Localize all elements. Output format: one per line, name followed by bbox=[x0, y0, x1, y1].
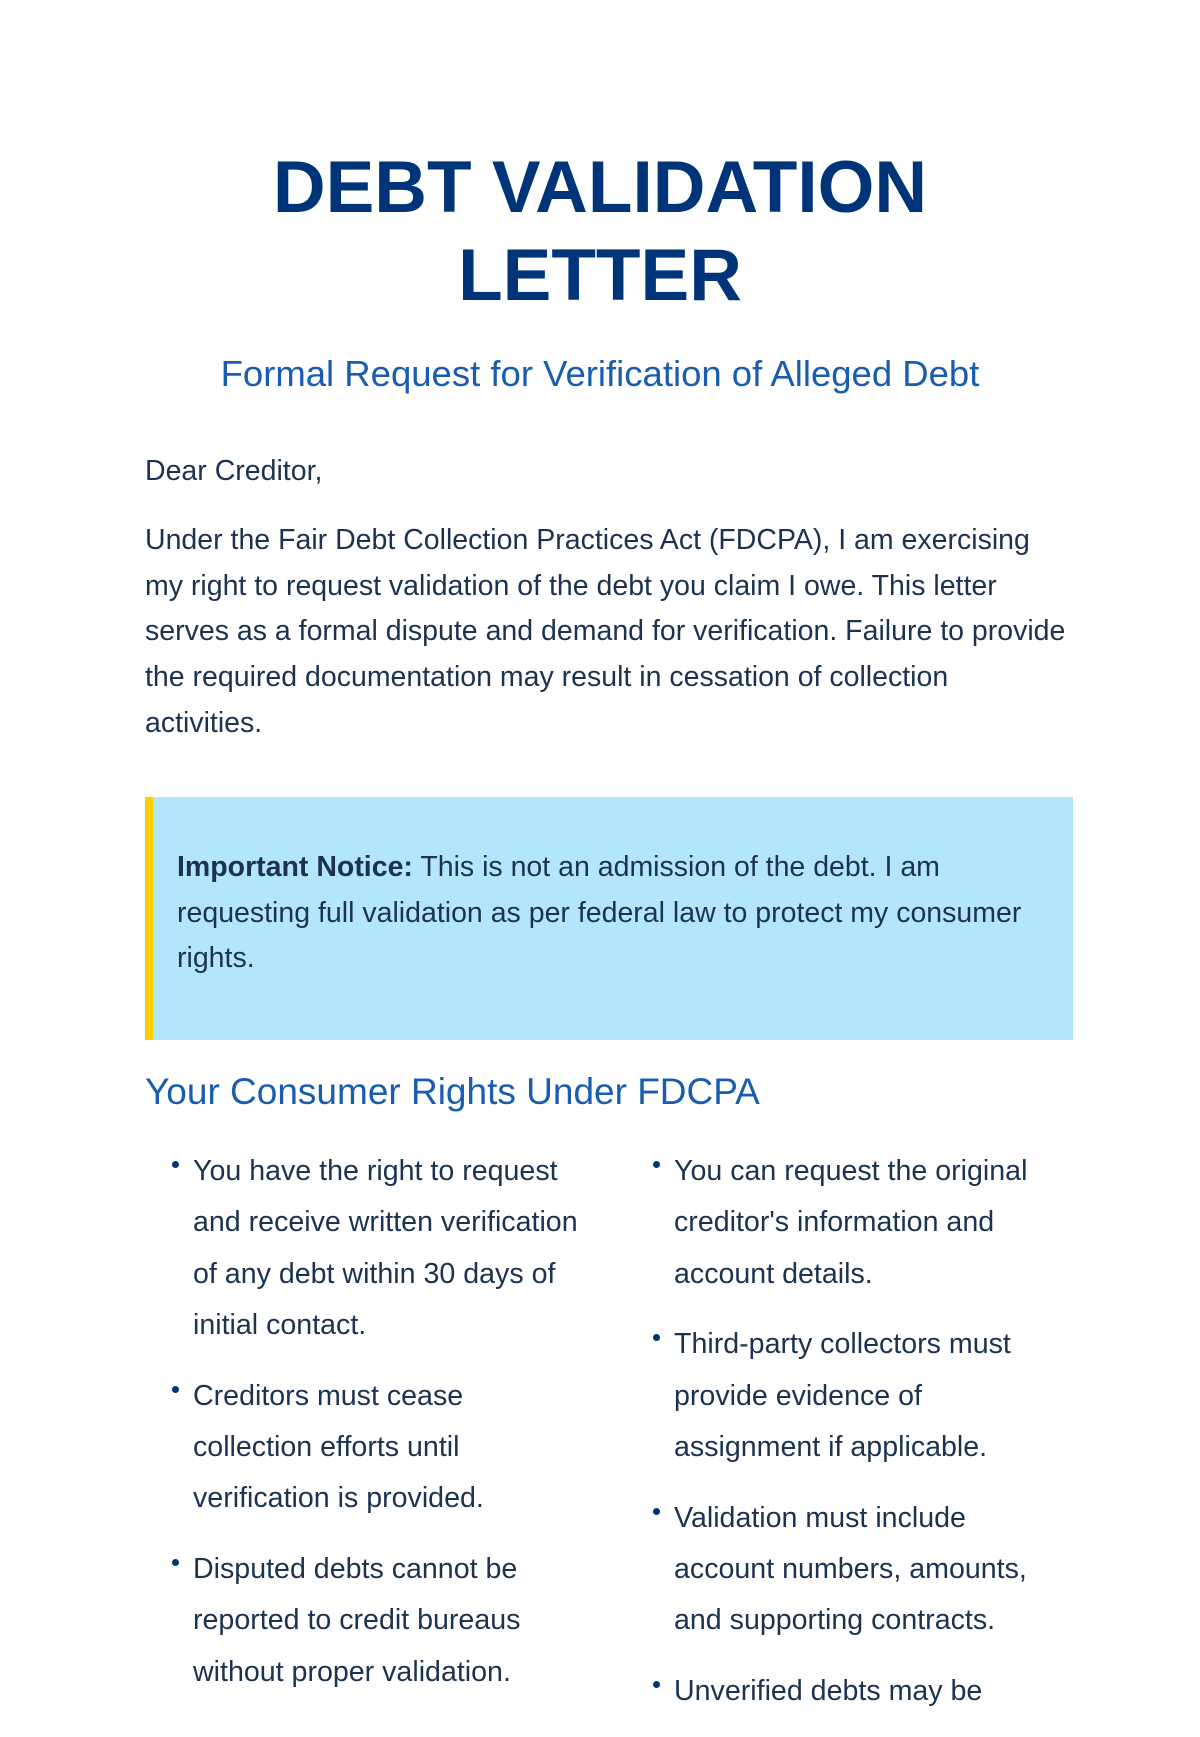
list item: original creditor: You can request the original bbox=[674, 1155, 1027, 1187]
list item: third-party collectors: Third-party collectors must bbox=[674, 1328, 1011, 1360]
greeting: Dear Creditor, bbox=[145, 455, 322, 487]
list item: validation contents bbox=[674, 1493, 1027, 1647]
callout: important notice bbox=[145, 797, 1073, 1040]
title: LETTER bbox=[458, 235, 742, 316]
intro paragraph bbox=[145, 524, 1065, 739]
list item: written verification bbox=[193, 1146, 578, 1351]
list item: written verification: of any debt within 30 days of bbox=[193, 1258, 555, 1290]
callout: important notice: Important Notice: This is not an admission of the debt. I am bbox=[177, 851, 940, 883]
list item: cease collection bbox=[193, 1371, 578, 1525]
list item: third-party collectors bbox=[674, 1319, 1027, 1473]
callout: important notice: requesting full validation as per federal law to protect my consumer bbox=[177, 897, 1021, 929]
list item: written verification: and receive written verification bbox=[193, 1206, 578, 1238]
list item: third-party collectors: assignment if applicable. bbox=[674, 1431, 987, 1463]
list item: credit bureaus: reported to credit bureaus bbox=[193, 1604, 520, 1636]
intro paragraph: the required documentation may result in cessation of collection bbox=[145, 661, 948, 693]
intro paragraph: serves as a formal dispute and demand for verification. Failure to provide bbox=[145, 615, 1065, 647]
title: DEBT VALIDATION bbox=[273, 147, 927, 228]
list item: credit bureaus: Disputed debts cannot be bbox=[193, 1553, 517, 1585]
list item: unverified debts: Unverified debts may be bbox=[674, 1675, 982, 1707]
list item: validation contents: and supporting contracts. bbox=[674, 1604, 995, 1636]
intro paragraph: activities. bbox=[145, 707, 262, 739]
list item: original creditor: creditor's information and bbox=[674, 1206, 994, 1238]
list item: credit bureaus: without proper validation. bbox=[193, 1656, 511, 1688]
list item: validation contents: Validation must include bbox=[674, 1502, 966, 1534]
list item: third-party collectors: provide evidence of bbox=[674, 1380, 922, 1412]
callout: important notice: rights. bbox=[177, 942, 255, 974]
list item: credit bureaus bbox=[193, 1544, 578, 1698]
list: right column rights bbox=[653, 1155, 1027, 1707]
heading: consumer rights: Your Consumer Rights Under FDCPA bbox=[145, 1071, 760, 1112]
list: left column rights bbox=[172, 1155, 578, 1688]
list item: cease collection: Creditors must cease bbox=[193, 1380, 463, 1412]
list item: cease collection: verification is provided. bbox=[193, 1482, 484, 1514]
intro paragraph: Under the Fair Debt Collection Practices Act (FDCPA), I am exercising bbox=[145, 524, 1030, 556]
subtitle: Formal Request for Verification of Alleged Debt bbox=[221, 353, 979, 394]
list item: validation contents: account numbers, amounts, bbox=[674, 1553, 1027, 1585]
list item: written verification: You have the right to request bbox=[193, 1155, 558, 1187]
title bbox=[273, 147, 927, 316]
list item: written verification: initial contact. bbox=[193, 1309, 366, 1341]
list item: original creditor bbox=[674, 1146, 1027, 1300]
list item: cease collection: collection efforts until bbox=[193, 1431, 460, 1463]
list item: original creditor: account details. bbox=[674, 1258, 873, 1290]
intro paragraph: my right to request validation of the debt you claim I owe. This letter bbox=[145, 570, 997, 602]
